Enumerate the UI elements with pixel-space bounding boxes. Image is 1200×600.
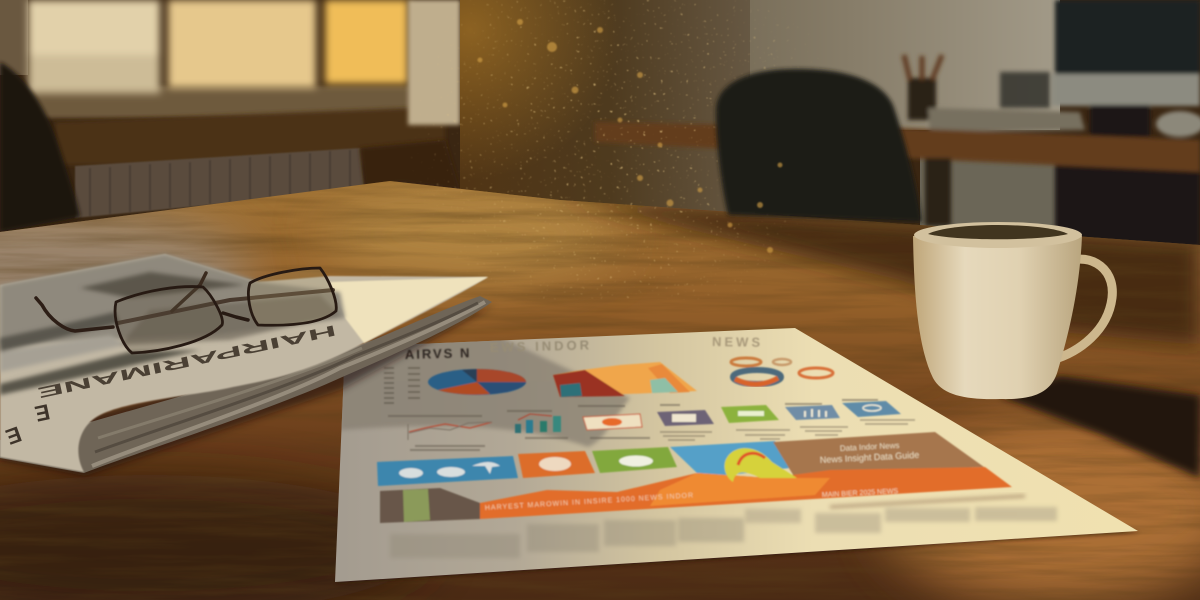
wooden table	[0, 175, 1200, 600]
reading glasses	[36, 268, 336, 353]
mug handle	[1052, 259, 1112, 360]
newspaper images	[0, 272, 340, 395]
right bottom text	[745, 496, 1057, 533]
headline fragment two: E	[2, 421, 25, 450]
grey-purple tile	[657, 410, 714, 426]
window panes	[28, 0, 408, 94]
pie chart	[428, 369, 526, 395]
hero banner: MAIN BIER 2025 NEWS	[822, 488, 899, 499]
wood grain	[0, 175, 1200, 600]
hero banner: Data Indor News	[840, 441, 900, 453]
radiator	[75, 148, 365, 218]
red outlined box	[583, 414, 642, 430]
pencil cup	[904, 55, 942, 120]
top sheet	[0, 254, 488, 472]
coffee mug	[913, 222, 1112, 399]
hero banner	[380, 432, 1012, 523]
hero banner: News Insight Data Guide	[820, 450, 920, 465]
bottom text columns	[390, 518, 744, 558]
wall pillar	[408, 0, 460, 125]
green tile	[721, 405, 779, 423]
bar chart	[515, 414, 561, 433]
monitor	[1055, 0, 1200, 74]
headline fragment: E	[33, 399, 52, 427]
newspaper	[0, 254, 495, 476]
mug opening	[914, 222, 1082, 248]
tile captions	[660, 420, 915, 440]
donut charts	[731, 358, 833, 384]
document title: NEWS	[712, 334, 763, 350]
desk top	[595, 122, 1200, 172]
line chart	[408, 422, 492, 440]
blue tile two	[842, 401, 901, 417]
area chart	[553, 362, 697, 397]
page stack	[0, 296, 492, 473]
back wall and window	[0, 0, 1200, 250]
section caption lines	[388, 400, 878, 450]
mug body	[913, 236, 1082, 399]
blue tile	[785, 405, 840, 420]
coffee surface	[928, 225, 1068, 239]
banner strip text: HARYEST MAROWIN IN INSIRE 1000 NEWS INDOR	[485, 492, 694, 512]
document title	[404, 336, 760, 360]
office chair	[716, 69, 922, 222]
mug cast shadow	[1000, 376, 1200, 478]
orange blue tile row	[377, 447, 677, 486]
document title: EWS INDOR	[490, 337, 592, 355]
axis ticks	[384, 368, 420, 403]
dark sunlit wall	[460, 0, 755, 225]
fine dust haze	[428, 0, 792, 298]
left chair	[0, 62, 80, 232]
table shadow	[560, 198, 1200, 345]
document title: AIRVS N	[405, 345, 472, 362]
paper shadow from newspaper	[340, 336, 630, 447]
background desk and objects	[595, 0, 1200, 247]
infographic document on table	[335, 328, 1140, 583]
newspaper masthead: HAIRPARIMANE	[36, 321, 338, 401]
dust particles	[478, 19, 782, 253]
